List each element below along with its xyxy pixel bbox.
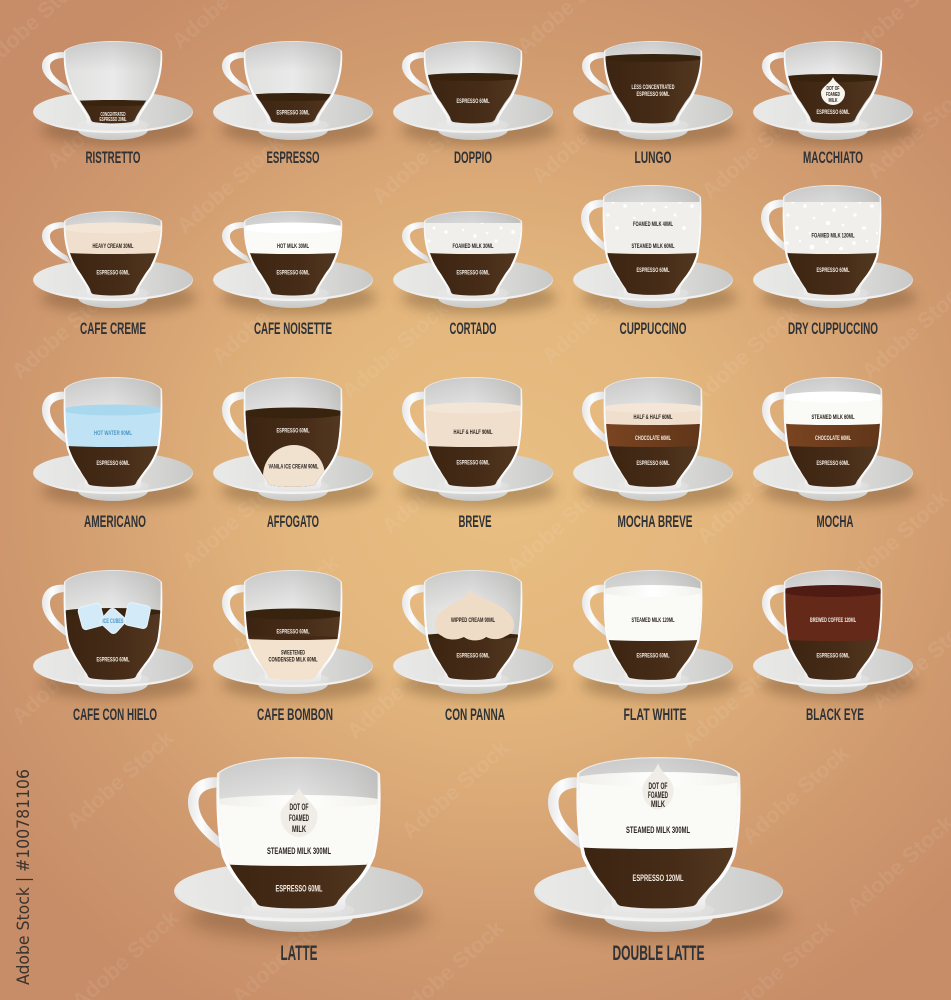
watermarks: Adobe Stock bbox=[62, 725, 179, 834]
drink: cuppuccino: STEAMED MILK 60ML bbox=[632, 243, 675, 250]
drink: lungo bbox=[573, 41, 737, 167]
drink: cuppuccino: ESPRESSO 60ML bbox=[636, 267, 670, 274]
drink: breve: BREVE bbox=[458, 513, 492, 531]
watermarks: Adobe Stock bbox=[697, 95, 814, 204]
drink: flat white: ESPRESSO 60ML bbox=[636, 652, 670, 660]
drink: mocha breve: CHOCOLATE 60ML bbox=[635, 435, 671, 442]
drink: cuppuccino: FOAMED MILK 40ML bbox=[633, 221, 673, 228]
watermarks: Adobe Stock bbox=[7, 620, 124, 729]
drink: cafe con hielo: ICE CUBES bbox=[102, 618, 124, 625]
drink: con panna: CON PANNA bbox=[445, 706, 505, 724]
watermarks: Adobe Stock bbox=[502, 470, 619, 579]
drink: flat white: FLAT WHITE bbox=[624, 706, 686, 724]
drink: cortado: CORTADO bbox=[450, 320, 497, 338]
icon: foam drop bbox=[281, 787, 317, 837]
drink: latte: ESPRESSO 60ML bbox=[276, 882, 323, 894]
drink: mocha: CHOCOLATE 60ML bbox=[815, 435, 851, 442]
watermarks: Adobe Stock bbox=[177, 465, 294, 574]
drink: latte: LATTE bbox=[280, 942, 318, 965]
drink: dry cuppuccino bbox=[753, 185, 917, 338]
watermarks: Adobe Stock bbox=[7, 275, 124, 384]
watermarks: Adobe Stock bbox=[537, 260, 654, 369]
drink: dry cuppuccino: ESPRESSO 60ML bbox=[816, 267, 850, 274]
drink: latte bbox=[174, 757, 429, 965]
drink: lungo: LESS CONCENTRATED bbox=[632, 84, 675, 91]
drink: doppio bbox=[393, 41, 557, 167]
drink: cafe bombon: CONDENSED MILK 60ML bbox=[268, 656, 318, 664]
drink: macchiato: MACCHIATO bbox=[803, 149, 863, 167]
drink: cortado: FOAMED MILK 30ML bbox=[452, 243, 494, 250]
drink: cafe con hielo: ESPRESSO 60ML bbox=[96, 656, 130, 664]
drink: mocha: MOCHA bbox=[816, 513, 854, 531]
drink: cafe bombon: SWEETENED bbox=[281, 650, 305, 656]
whipped cream bbox=[435, 588, 514, 640]
watermarks: Adobe Stock bbox=[677, 645, 794, 754]
watermarks: Adobe Stock bbox=[367, 100, 484, 209]
drink: cafe creme: HEAVY CREAM 30ML bbox=[92, 243, 134, 250]
drink: cafe creme bbox=[33, 211, 197, 338]
icon: foam drop bbox=[642, 763, 674, 809]
drink: macchiato: DOT OF bbox=[826, 86, 840, 92]
drink: macchiato: ESPRESSO 60ML bbox=[816, 109, 850, 116]
drink: ristretto: RISTRETTO bbox=[86, 149, 141, 167]
drink: affogato: VANILA ICE CREAM 90ML bbox=[268, 464, 319, 470]
drink: cafe bombon: CAFE BOMBON bbox=[257, 706, 333, 724]
drink: breve: HALF & HALF 90ML bbox=[454, 429, 493, 436]
drink: latte: DOT OF bbox=[290, 801, 309, 812]
drink: lungo: LUNGO bbox=[634, 149, 672, 167]
drink: cafe bombon bbox=[213, 570, 377, 724]
drink: americano: HOT WATER 90ML bbox=[94, 430, 132, 437]
drink: cafe creme: ESPRESSO 60ML bbox=[96, 270, 130, 276]
drink: con panna: WIPPED CREAM 90ML bbox=[451, 617, 495, 624]
drink: cortado: ESPRESSO 60ML bbox=[456, 270, 490, 276]
drink: black eye: ESPRESSO 60ML bbox=[816, 652, 850, 660]
drink: affogato: AFFOGATO bbox=[267, 513, 319, 531]
watermarks: Adobe Stock bbox=[737, 740, 854, 849]
drink: cuppuccino bbox=[573, 185, 737, 338]
drink: double latte: DOT OF bbox=[648, 780, 668, 791]
drink: espresso: ESPRESSO 30ML bbox=[276, 110, 310, 116]
drink: affogato: ESPRESSO 60ML bbox=[276, 428, 310, 434]
drink: americano: AMERICANO bbox=[84, 513, 146, 531]
stock id side text: Adobe Stock | #100781106 bbox=[14, 769, 34, 985]
drink: cafe noisette: HOT MILK 30ML bbox=[277, 243, 309, 250]
drink: cafe con hielo bbox=[33, 570, 197, 724]
drink: ristretto: CONCENTRATED bbox=[100, 112, 126, 118]
drink: cafe noisette: CAFE NOISETTE bbox=[254, 320, 332, 338]
drink: double latte: FOAMED bbox=[648, 789, 668, 800]
drink: affogato bbox=[213, 377, 377, 531]
drink: doppio: ESPRESSO 60ML bbox=[456, 98, 490, 105]
drink: cafe con hielo: CAFE CON HIELO bbox=[73, 706, 157, 724]
drink: flat white: STEAMED MILK 120ML bbox=[632, 617, 675, 624]
drink: latte: STEAMED MILK 300ML bbox=[267, 845, 331, 856]
drink: breve: ESPRESSO 60ML bbox=[456, 460, 490, 466]
drink: cafe noisette: ESPRESSO 60ML bbox=[276, 270, 310, 276]
watermarks: Adobe Stock bbox=[337, 295, 454, 404]
drink: black eye bbox=[753, 570, 917, 724]
icon: ice cubes bbox=[77, 602, 151, 635]
drink: mocha: ESPRESSO 60ML bbox=[816, 460, 850, 467]
drink: dry cuppuccino: DRY CUPPUCCINO bbox=[788, 320, 878, 338]
drink: mocha: STEAMED MILK 60ML bbox=[812, 414, 855, 421]
drink: double latte: STEAMED MILK 300ML bbox=[626, 824, 690, 835]
drink: cafe bombon: ESPRESSO 60ML bbox=[276, 628, 310, 636]
drink: cortado bbox=[393, 211, 557, 338]
drink: latte: FOAMED bbox=[289, 812, 309, 823]
icon: foam drop bbox=[821, 77, 845, 105]
drink: macchiato bbox=[753, 41, 917, 167]
watermarks: Adobe Stock bbox=[377, 430, 494, 539]
drink: latte: MILK bbox=[292, 823, 306, 834]
drink: doppio: DOPPIO bbox=[454, 149, 492, 167]
drink: espresso bbox=[213, 41, 377, 167]
drink: americano: ESPRESSO 60ML bbox=[96, 460, 130, 467]
drink: double latte: DOUBLE LATTE bbox=[612, 942, 704, 965]
drink: espresso: ESPRESSO bbox=[266, 149, 320, 167]
drink: double latte: ESPRESSO 120ML bbox=[632, 872, 684, 883]
drink: cafe creme: CAFE CREME bbox=[80, 320, 146, 338]
drink: breve bbox=[393, 377, 557, 531]
drink: americano bbox=[33, 377, 197, 531]
drink: black eye: BLACK EYE bbox=[806, 706, 864, 724]
watermarks: Adobe Stock bbox=[692, 440, 809, 549]
drink: cuppuccino: CUPPUCCINO bbox=[620, 320, 687, 338]
drink: mocha breve: MOCHA BREVE bbox=[618, 513, 692, 531]
drink: cafe noisette bbox=[213, 211, 377, 338]
drink: dry cuppuccino: FOAMED MILK 120ML bbox=[812, 232, 855, 240]
drink: double latte bbox=[534, 757, 789, 965]
watermarks: Adobe Stock bbox=[527, 80, 644, 189]
drink: mocha breve: ESPRESSO 60ML bbox=[636, 460, 670, 467]
drink: macchiato: MILK bbox=[828, 98, 838, 104]
drink: mocha bbox=[753, 377, 917, 531]
drink: mocha breve bbox=[573, 377, 737, 531]
drink: ristretto bbox=[33, 41, 197, 167]
drink: con panna bbox=[393, 570, 557, 724]
watermarks: Adobe Stock bbox=[42, 65, 159, 174]
drink: macchiato: FOAMED bbox=[826, 92, 840, 98]
drink: ristretto: ESPRESSO 20ML bbox=[100, 117, 127, 123]
drink: con panna: ESPRESSO 60ML bbox=[456, 652, 490, 660]
watermarks: Adobe Stock bbox=[172, 130, 289, 239]
drink: mocha breve: HALF & HALF 60ML bbox=[634, 414, 673, 421]
watermarks: Adobe Stock bbox=[397, 735, 514, 844]
watermarks: Adobe Stock bbox=[687, 300, 804, 409]
watermarks: Adobe Stock bbox=[207, 260, 324, 369]
drink: lungo: ESPRESSO 90ML bbox=[636, 91, 670, 98]
drink: black eye: BREWED COFFEE 120ML bbox=[810, 617, 856, 624]
drink: double latte: MILK bbox=[651, 798, 665, 809]
watermarks: Adobe Stock bbox=[342, 635, 459, 744]
drink: flat white bbox=[573, 570, 737, 724]
watermarks: Adobe Stock bbox=[837, 485, 951, 594]
watermarks: Adobe Stock bbox=[227, 550, 344, 659]
